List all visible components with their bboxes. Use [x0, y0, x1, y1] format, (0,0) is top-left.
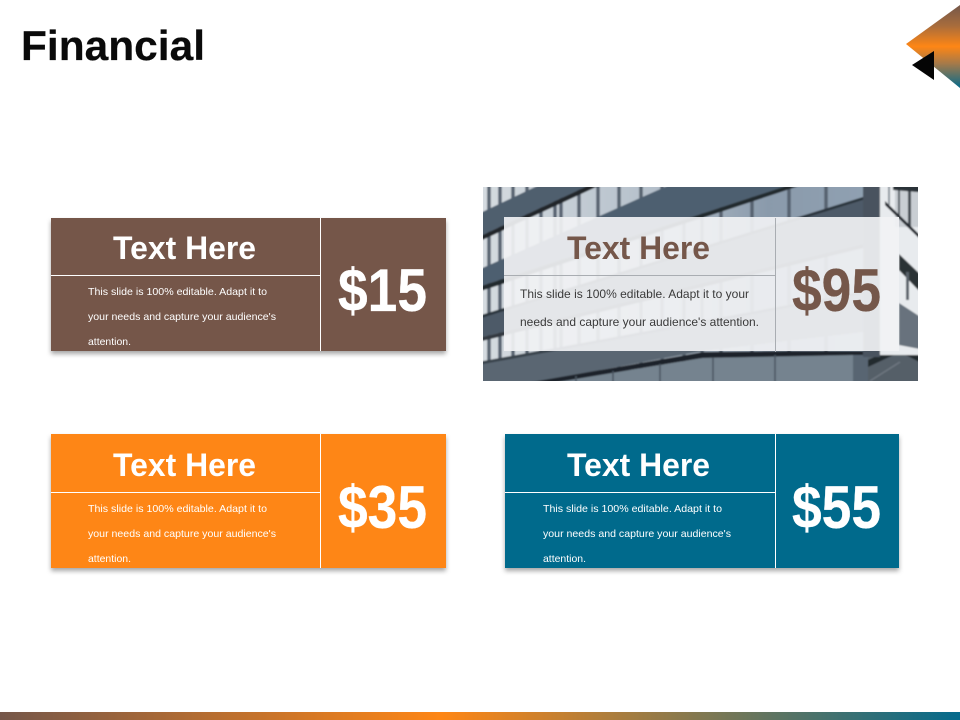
panel: photo price card: needs and capture your audience's attention.	[520, 315, 759, 329]
panel: brown price card	[51, 218, 446, 351]
panel: teal price card: attention.	[543, 553, 586, 565]
panel: teal price card: Text Here	[567, 447, 710, 483]
panel: photo price card	[483, 187, 918, 381]
panel: orange price card: attention.	[88, 553, 131, 565]
panel: brown price card: Text Here	[113, 230, 256, 266]
panel: orange price card: Text Here	[113, 447, 256, 483]
translucent card	[504, 217, 899, 351]
panel: photo price card: Text Here	[567, 230, 710, 266]
footer gradient bar	[0, 712, 960, 720]
panel: brown price card: your needs and capture your audience's	[88, 311, 276, 323]
panel: orange price card: $35	[338, 474, 427, 541]
panel: brown price card: This slide is 100% editable. Adapt it to	[88, 286, 267, 298]
panel: brown price card: $15	[338, 257, 427, 324]
icon: corner logo	[906, 5, 960, 88]
panel: photo price card: $95	[792, 257, 881, 324]
panel: teal price card: your needs and capture your audience's	[543, 528, 731, 540]
panel: teal price card: $55	[792, 474, 881, 541]
panel: teal price card: This slide is 100% editable. Adapt it to	[543, 503, 722, 515]
panel: brown price card: attention.	[88, 336, 131, 348]
panel: orange price card: your needs and capture your audience's	[88, 528, 276, 540]
panel: orange price card	[51, 434, 446, 568]
panel: photo price card: This slide is 100% editable. Adapt it to your	[520, 287, 749, 301]
panel: orange price card: This slide is 100% editable. Adapt it to	[88, 503, 267, 515]
photo: office building	[483, 187, 918, 381]
panel: teal price card	[505, 434, 899, 568]
title: Financial	[21, 22, 205, 69]
